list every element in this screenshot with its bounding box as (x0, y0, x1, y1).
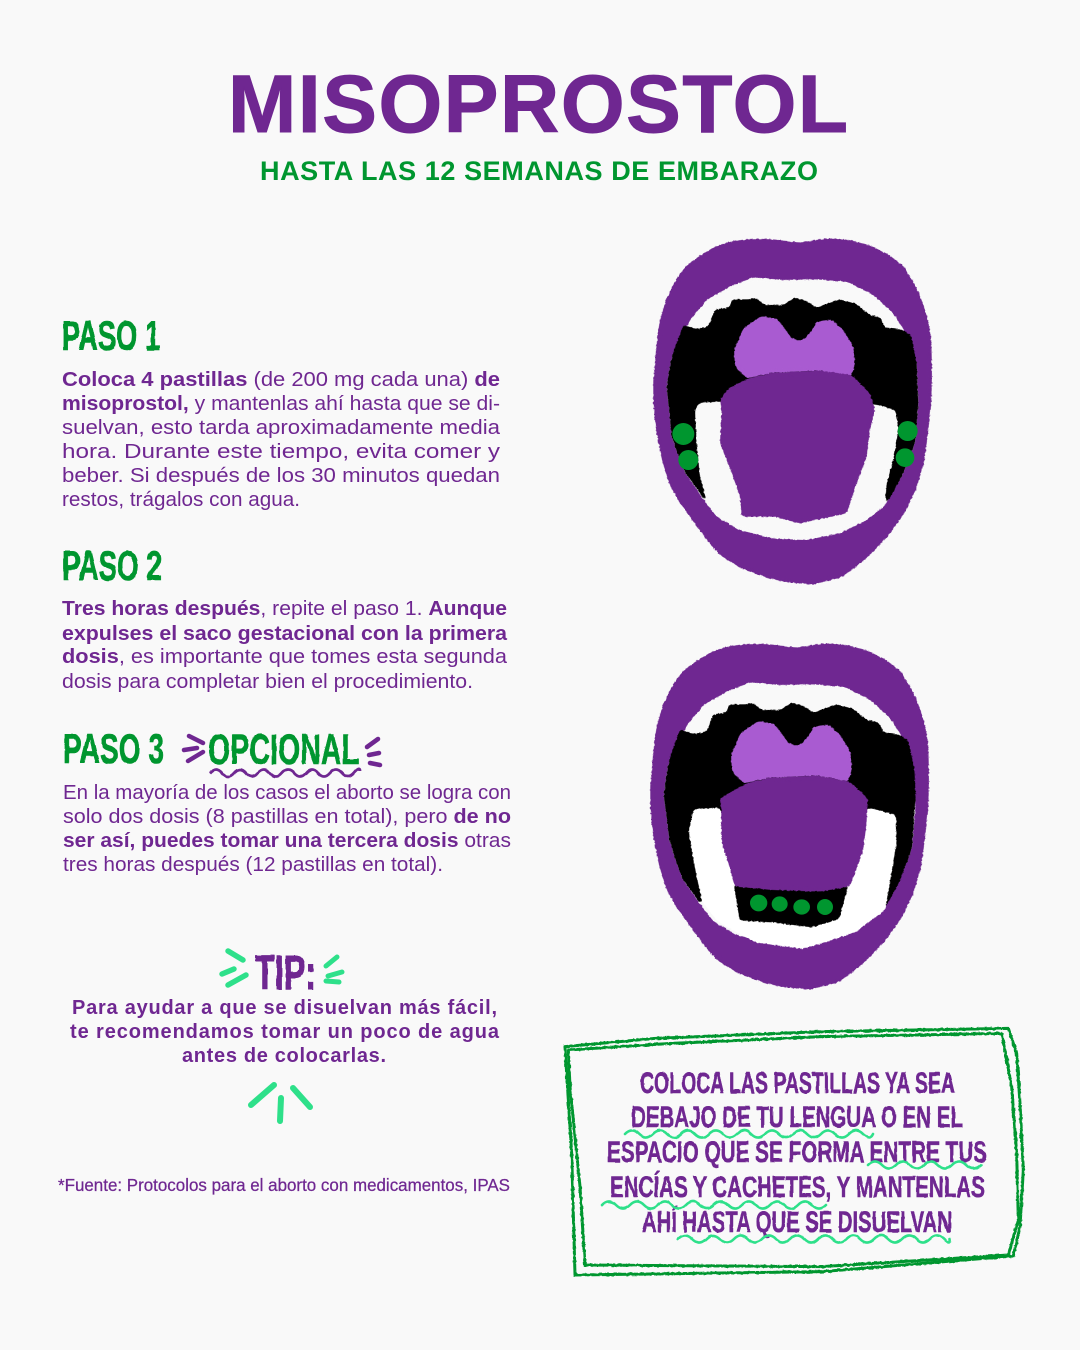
lower gums (689, 808, 897, 949)
icon: purple right sparks (367, 739, 380, 765)
tip text: Para ayudar a que se disuelvan más fácil, (72, 997, 497, 1019)
text block: paso 1: hora. Durante este tiempo, evita comer y (62, 441, 500, 463)
tongue (720, 371, 875, 523)
lower gums (695, 402, 898, 540)
lips (653, 238, 932, 584)
callout text (607, 1067, 987, 1239)
throat (667, 297, 918, 505)
callout underlines (602, 1130, 981, 1242)
lips (650, 643, 929, 989)
tip text: antes de colocarlas. (182, 1045, 386, 1067)
throat (664, 702, 916, 910)
heading: paso 2: PASO 2 (62, 542, 162, 589)
uvula (734, 316, 855, 378)
text block: paso 2 (62, 598, 508, 693)
tongue (720, 776, 868, 892)
icon: mint rays (251, 1085, 310, 1121)
illustration: mouth with pills in cheeks (653, 238, 932, 584)
text block: paso 1 (62, 369, 501, 511)
text block: paso 3: tres horas después (12 pastillas en total). (63, 854, 443, 876)
mouth opening (664, 682, 915, 948)
underline: opcional (210, 769, 360, 776)
uvula (731, 721, 852, 783)
text block: paso 3 (63, 782, 511, 876)
text block: paso 1: restos, trágalos con agua. (62, 489, 300, 511)
pills (750, 895, 833, 915)
icon: tip right sparks (326, 957, 342, 982)
text block: paso 1: suelvan, esto tarda aproximadamente media (62, 417, 501, 439)
text block: paso 2: dosis para completar bien el procedimiento. (62, 671, 473, 693)
callout box frame (565, 1028, 1023, 1275)
text block: paso 3: ser así, puedes tomar una tercera dosis otras (63, 830, 511, 852)
under-tongue space (734, 883, 849, 927)
title: MISOPROSTOL (228, 59, 848, 150)
icon: tip left sparks (222, 951, 246, 985)
heading: paso 1: PASO 1 (62, 312, 160, 359)
icon: purple left sparks (184, 736, 203, 761)
pills (672, 421, 918, 470)
text block: paso 1: Coloca 4 pastillas (de 200 mg cada una) de (62, 369, 500, 391)
mouth opening (667, 277, 918, 540)
source note: *Fuente: Protocolos para el aborto con medicamentos, IPAS (58, 1175, 510, 1195)
text block: paso 1: beber. Si después de los 30 minutos quedan (62, 465, 500, 487)
illustration: mouth with pills under tongue (650, 643, 929, 989)
text block: paso 2: dosis, es importante que tomes esta segunda (62, 646, 508, 668)
heading: opcional: OPCIONAL (208, 726, 359, 774)
heading: paso 3: PASO 3 (63, 725, 164, 772)
tip text (70, 997, 500, 1067)
text block: paso 2: expulses el saco gestacional con la primera (62, 623, 508, 645)
text block: paso 3: En la mayoría de los casos el aborto se logra con (63, 782, 511, 804)
text block: paso 3: solo dos dosis (8 pastillas en total), pero de no (63, 806, 511, 828)
text block: paso 1: misoprostol, y mantenlas ahí hasta que se di- (62, 393, 500, 415)
text block: paso 2: Tres horas después , repite el paso 1. Aunque (62, 598, 507, 620)
tip text: te recomendamos tomar un poco de agua (70, 1021, 500, 1043)
subtitle: HASTA LAS 12 SEMANAS DE EMBARAZO (260, 156, 818, 186)
tip heading: TIP: (255, 947, 316, 1000)
